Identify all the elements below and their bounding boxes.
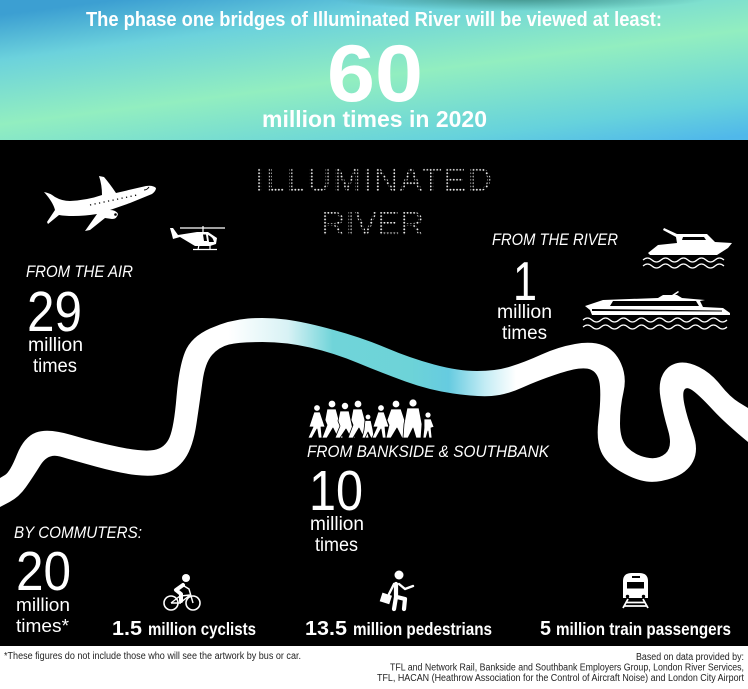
icon: train (623, 573, 648, 608)
banner number: 60 (327, 29, 423, 119)
icon: river ferry (583, 291, 730, 329)
stat: cyclists (112, 618, 256, 640)
stat: from the air: 29 (27, 280, 82, 344)
stat: from the river: FROM THE RIVER (492, 231, 618, 249)
title: Illuminated River dotted: ILLUMINATED (255, 162, 492, 199)
icon: motor yacht (643, 228, 732, 268)
stat: by commuters: 20 (16, 540, 71, 602)
stat: from the river (492, 231, 618, 344)
footnote: *These figures do not include those who will see the artwork by bus or car. (4, 651, 301, 662)
stat: from the river: 1 (513, 250, 537, 312)
stat: from the air: times (33, 356, 77, 377)
banner heading: The phase one bridges of Illuminated River will be viewed at least: (86, 9, 662, 31)
stat: train passengers: 5 (540, 618, 551, 640)
data sources (377, 652, 744, 684)
icon: aeroplane (44, 176, 156, 231)
panel: footer (0, 646, 748, 689)
stat: pedestrians: million pedestrians (353, 619, 492, 639)
stat: pedestrians (305, 618, 492, 640)
panel: headline banner (0, 0, 748, 140)
stat: from the air: million (28, 335, 83, 356)
stat: by commuters: times* (16, 616, 69, 636)
stat: by commuters (14, 524, 142, 636)
icon: pedestrian with bag (380, 570, 413, 609)
stat: from bankside and southbank: million (310, 514, 364, 535)
stat: from bankside and southbank (307, 443, 550, 556)
stat: by commuters: BY COMMUTERS: (14, 524, 142, 542)
banner subheading: million times in 2020 (262, 106, 487, 132)
stat: by commuters: million (16, 595, 70, 615)
stat: cyclists: million cyclists (148, 619, 256, 639)
stat: from bankside and southbank: FROM BANKSIDE & SOUTHBANK (307, 443, 550, 461)
title: Illuminated River dotted (255, 162, 492, 243)
icon: helicopter (170, 226, 225, 250)
stat: cyclists: 1.5 (112, 618, 142, 640)
icon: walking crowd (308, 399, 434, 438)
stat: from the air: FROM THE AIR (26, 263, 133, 281)
title: Illuminated River dotted: RIVER (321, 206, 424, 243)
icon: cyclist (164, 574, 200, 610)
stat: from the air (26, 263, 133, 377)
stat: from bankside and southbank: 10 (309, 459, 363, 523)
river (0, 318, 748, 507)
stat: from the river: million (497, 302, 552, 323)
stat: pedestrians: 13.5 (305, 618, 347, 640)
stat: from the river: times (502, 323, 547, 344)
stat: from bankside and southbank: times (315, 535, 358, 556)
